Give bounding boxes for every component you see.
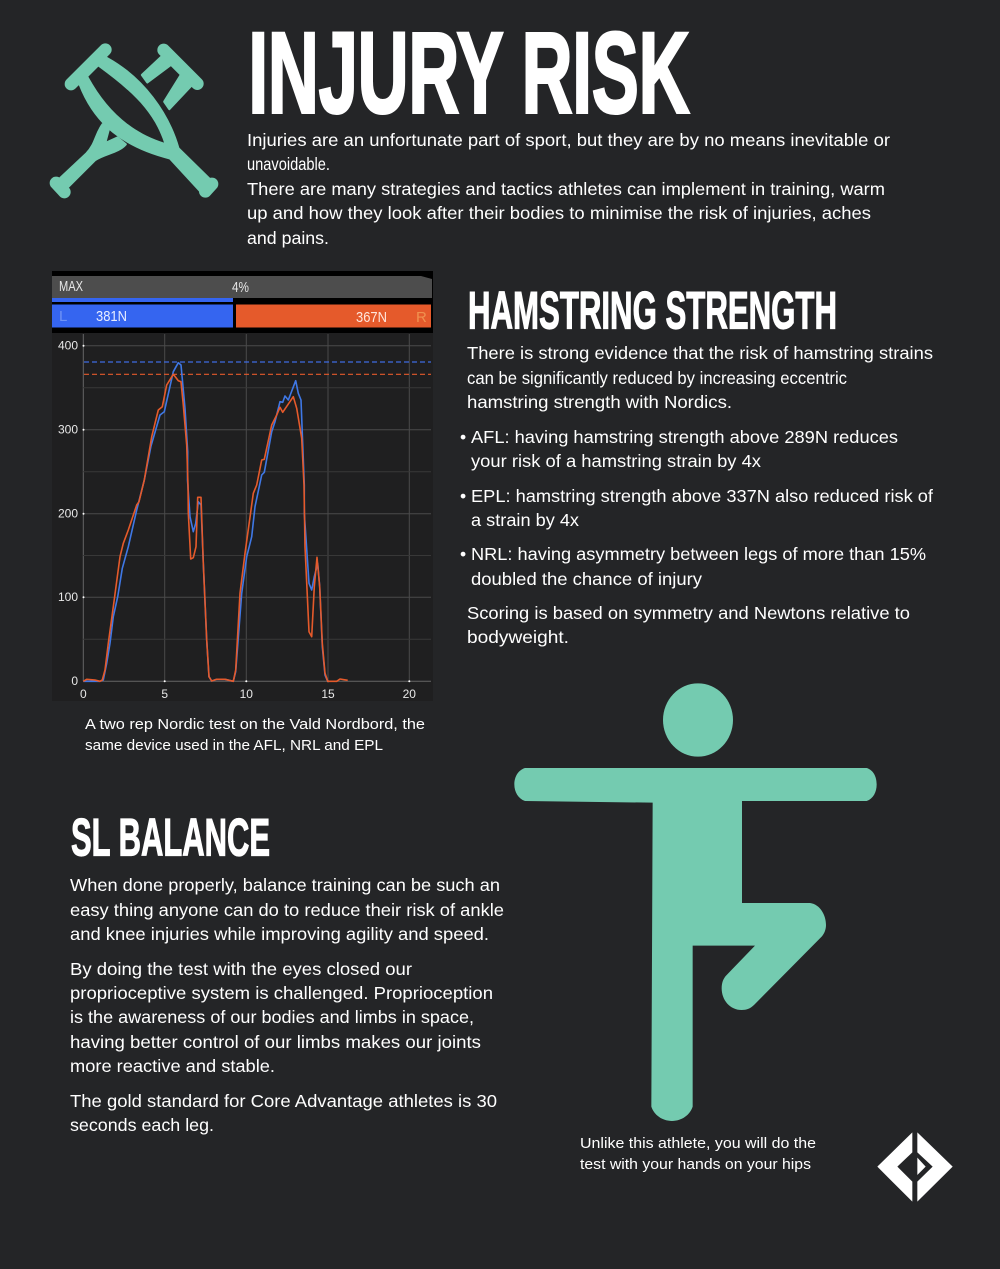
bullet list: league findings: your risk of a hamstring strain by 4x bbox=[471, 451, 761, 471]
chart caption bbox=[85, 716, 425, 754]
chart axis labels bbox=[58, 338, 416, 701]
text block: proprioception: By doing the test with the eyes closed our bbox=[70, 959, 412, 979]
line: right leg force bbox=[83, 374, 348, 681]
text block: introduction: Injuries are an unfortunate part of sport, but they are by no means inevitable or bbox=[247, 130, 890, 150]
chart header: L bbox=[59, 308, 67, 325]
text block: scoring bbox=[467, 603, 910, 647]
text block: balance training bbox=[70, 875, 504, 944]
text block: introduction bbox=[247, 130, 890, 248]
chart axis labels: 10 bbox=[240, 687, 253, 701]
icon: Core Advantage logo bbox=[877, 1132, 953, 1202]
text block: introduction: and pains. bbox=[247, 228, 329, 248]
chart axis labels: 100 bbox=[58, 590, 78, 604]
figure caption: test with your hands on your hips bbox=[580, 1156, 811, 1173]
max reference lines bbox=[84, 362, 431, 374]
bullet list: league findings bbox=[460, 427, 933, 589]
bullet list: league findings: doubled the chance of injury bbox=[471, 569, 702, 589]
text block: introduction: unavoidable. bbox=[247, 154, 330, 174]
bullet list: league findings: EPL: hamstring strength above 337N also reduced risk of bbox=[471, 486, 933, 506]
icon: athlete balancing on one leg bbox=[514, 683, 877, 1121]
chart axis labels: 20 bbox=[403, 687, 416, 701]
chart axis labels: 5 bbox=[161, 687, 168, 701]
line: left leg force bbox=[83, 363, 328, 681]
text block: gold standard bbox=[70, 1091, 497, 1135]
chart caption: A two rep Nordic test on the Vald Nordbord, the bbox=[85, 716, 425, 733]
chart axis labels: 0 bbox=[71, 674, 78, 688]
text block: hamstring evidence: can be significantly reduced by increasing eccentric bbox=[467, 368, 847, 388]
text block: hamstring evidence bbox=[467, 343, 933, 412]
chart header: 4% bbox=[232, 279, 249, 296]
panel: Nordbord chart bbox=[52, 271, 433, 701]
figure caption bbox=[580, 1135, 816, 1173]
bullet list: league findings: a strain by 4x bbox=[471, 510, 579, 530]
text block: introduction: There are many strategies and tactics athletes can implement in training, warm bbox=[247, 179, 885, 199]
chart header: 381N bbox=[96, 308, 127, 325]
text block: proprioception: more reactive and stable. bbox=[70, 1056, 275, 1076]
text block: scoring: bodyweight. bbox=[467, 627, 569, 647]
text block: proprioception bbox=[70, 959, 493, 1076]
text block: proprioception: proprioceptive system is challenged. Proprioception bbox=[70, 983, 493, 1003]
text block: proprioception: is the awareness of our bodies and limbs in space, bbox=[70, 1007, 474, 1027]
chart axis labels: 300 bbox=[58, 422, 78, 436]
bullet list: league findings: • bbox=[460, 544, 466, 564]
chart header: R bbox=[416, 309, 427, 326]
chart axis labels: 400 bbox=[58, 338, 78, 352]
text block: proprioception: having better control of our limbs makes our joints bbox=[70, 1032, 481, 1052]
bullet list: league findings: AFL: having hamstring strength above 289N reduces bbox=[471, 427, 898, 447]
text block: hamstring evidence: hamstring strength with Nordics. bbox=[467, 392, 732, 412]
chart grid bbox=[83, 334, 431, 681]
chart axis labels: 0 bbox=[80, 687, 87, 701]
chart axis labels: 15 bbox=[321, 687, 335, 701]
text block: gold standard: The gold standard for Core Advantage athletes is 30 bbox=[70, 1091, 497, 1111]
text block: scoring: Scoring is based on symmetry and Newtons relative to bbox=[467, 603, 910, 623]
text block: introduction: up and how they look after their bodies to minimise the risk of injuries, aches bbox=[247, 203, 871, 223]
chart axis labels: 200 bbox=[58, 506, 78, 520]
title: INJURY RISK bbox=[248, 10, 690, 138]
figure caption: Unlike this athlete, you will do the bbox=[580, 1135, 816, 1152]
chart header bbox=[52, 271, 433, 333]
text block: hamstring evidence: There is strong evidence that the risk of hamstring strains bbox=[467, 343, 933, 363]
chart header: 367N bbox=[356, 309, 387, 326]
bullet list: league findings: • bbox=[460, 486, 466, 506]
chart header: MAX bbox=[59, 278, 83, 295]
bullet list: league findings: • bbox=[460, 427, 466, 447]
icon: crossed crutches bbox=[56, 50, 214, 193]
heading: SL balance: SL BALANCE bbox=[71, 808, 270, 868]
text block: balance training: and knee injuries while improving agility and speed. bbox=[70, 924, 489, 944]
chart caption: same device used in the AFL, NRL and EPL bbox=[85, 737, 383, 754]
bullet list: league findings: NRL: having asymmetry between legs of more than 15% bbox=[471, 544, 926, 564]
text block: balance training: When done properly, balance training can be such an bbox=[70, 875, 500, 895]
text block: balance training: easy thing anyone can do to reduce their risk of ankle bbox=[70, 900, 504, 920]
text block: gold standard: seconds each leg. bbox=[70, 1115, 214, 1135]
